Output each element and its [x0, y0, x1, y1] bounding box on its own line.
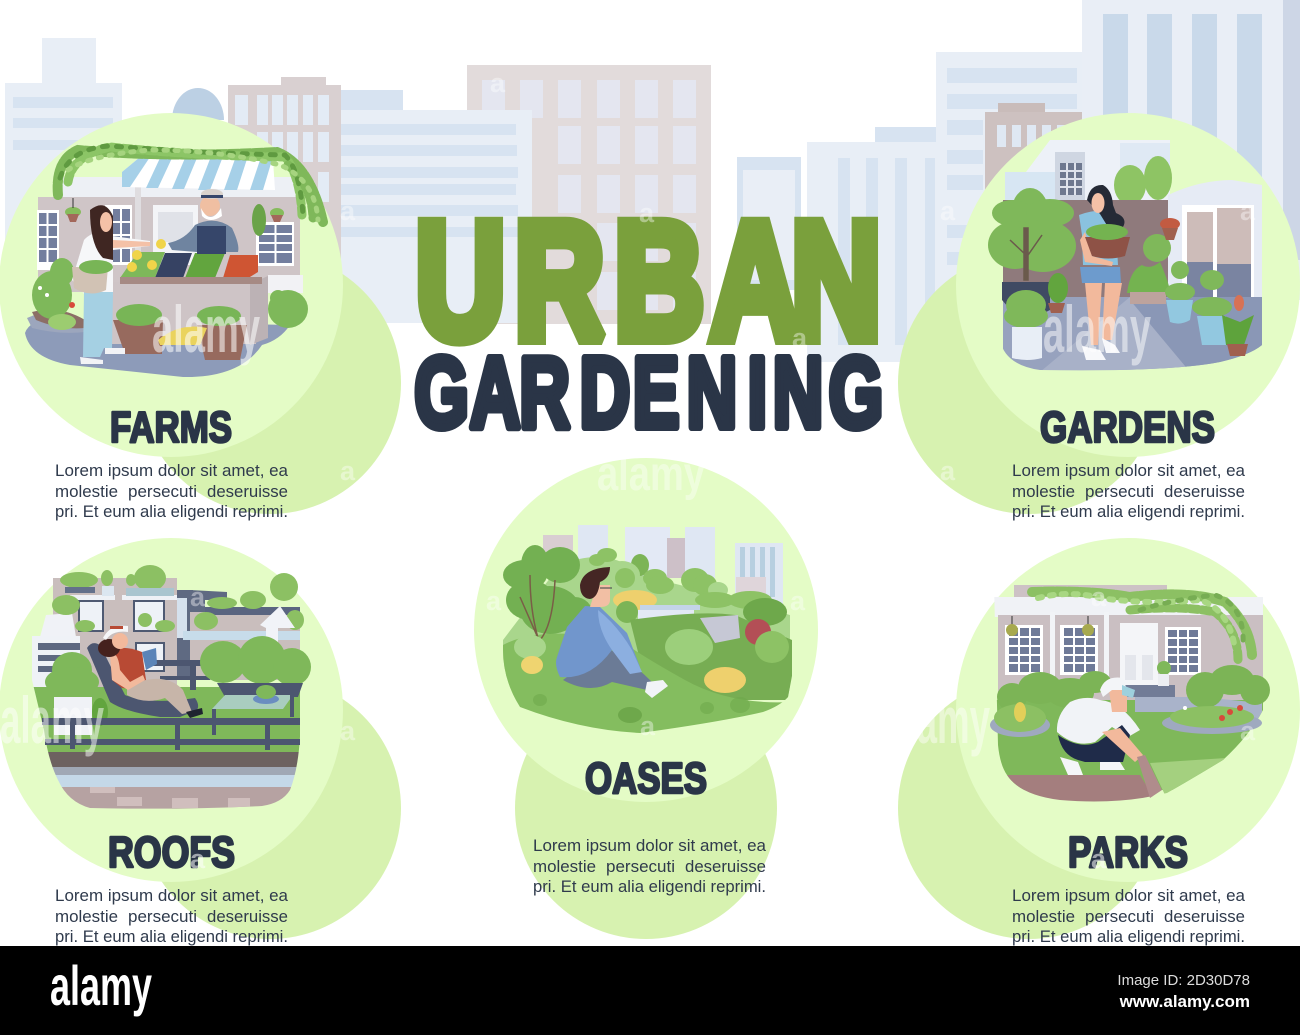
seller [156, 189, 238, 254]
heading: gardens: GARDENS [1040, 403, 1215, 452]
watermark: farms: alamy [152, 292, 260, 366]
distant buildings [543, 525, 783, 608]
city skyline background [5, 0, 1300, 362]
small watermarks: a [486, 586, 502, 616]
small watermarks [190, 68, 1256, 874]
heading: oases: OASES [585, 754, 707, 803]
right bush [268, 290, 308, 328]
small lawn shrubs [533, 694, 750, 723]
potted bush [45, 652, 108, 735]
text: farms body: Lorem ipsum dolor sit amet, ea [55, 461, 289, 480]
small watermarks: a [190, 844, 206, 874]
text: parks body: persecuti [1085, 907, 1154, 926]
chimney [260, 606, 295, 652]
building: tall brown centre [467, 65, 711, 324]
small watermarks: a [640, 711, 656, 741]
text: gardens body: molestie [1012, 482, 1075, 501]
text: farms body: molestie [55, 482, 118, 501]
windows [1005, 623, 1201, 686]
text: oases body: molestie [533, 857, 596, 876]
text: farms body: persecuti [128, 482, 197, 501]
gardener woman [1079, 185, 1130, 360]
panel: farms [0, 113, 401, 521]
building: small outlined [737, 157, 801, 290]
text: roofs body: Lorem ipsum dolor sit amet, ea [55, 886, 289, 905]
panel: parks [886, 538, 1300, 946]
pavilion [613, 590, 700, 623]
text: parks body: deseruisse [1164, 907, 1245, 926]
vines [1032, 592, 1252, 660]
heading: parks: PARKS [1068, 828, 1188, 877]
tree on left [503, 545, 593, 634]
text: gardens body [1012, 461, 1246, 521]
text: gardens body: pri. Et eum alia eligendi reprimi. [1012, 502, 1245, 521]
title: urban: URBAN [416, 189, 881, 374]
illustration: rooftop terrace [32, 565, 312, 812]
hanging baskets [1006, 616, 1094, 636]
text: parks body: pri. Et eum alia eligendi reprimi. [1012, 927, 1245, 946]
circle: roofs back [139, 677, 401, 939]
text: roofs body: deseruisse [207, 907, 288, 926]
text: oases body: persecuti [606, 857, 675, 876]
baskets [113, 304, 247, 360]
building: brown right [985, 103, 1087, 232]
mid lawn [630, 613, 792, 700]
small watermarks: a [639, 198, 655, 228]
illustration: house and lawn [990, 585, 1270, 803]
text: parks body [1012, 886, 1246, 946]
watermark: roofs: alamy [0, 683, 104, 757]
large planters [200, 636, 311, 697]
image id: Image ID: 2D30D78 [1117, 972, 1250, 989]
left flower bed [27, 258, 85, 333]
small watermarks: a [790, 586, 806, 616]
small watermarks: a [1091, 582, 1107, 612]
big potted tree [988, 188, 1076, 315]
footer logo: alamy [50, 954, 152, 1017]
right shrubs [743, 598, 789, 663]
text: farms body: deseruisse [207, 482, 288, 501]
small watermarks: a [792, 323, 808, 353]
building: brown left [228, 77, 341, 325]
circle: gardens back [898, 252, 1160, 514]
small watermarks: a [340, 456, 356, 486]
coffee table [212, 685, 294, 735]
gardener man [1057, 678, 1162, 798]
heading: roofs: ROOFS [108, 828, 235, 877]
text: parks body: molestie [1012, 907, 1075, 926]
illustration: terrace garden [988, 140, 1262, 372]
building: wide striped [341, 90, 532, 323]
circle: gardens front [956, 113, 1300, 457]
text: roofs body: persecuti [128, 907, 197, 926]
text: oases body: Lorem ipsum dolor sit amet, ea [533, 836, 767, 855]
hanging baskets [65, 198, 284, 236]
website: www.alamy.com [1119, 992, 1250, 1011]
railing [42, 718, 300, 750]
text: gardens body: persecuti [1085, 482, 1154, 501]
title: gardening: GARDENING [414, 338, 883, 449]
building: dome [172, 88, 224, 120]
circle: farms back [139, 252, 401, 514]
small watermarks: a [340, 196, 356, 226]
circle: parks back [898, 677, 1160, 939]
text: oases body: pri. Et eum alia eligendi reprimi. [533, 877, 766, 896]
text: roofs body: molestie [55, 907, 118, 926]
text: farms body: pri. Et eum alia eligendi reprimi. [55, 502, 288, 521]
building: far left tower [5, 38, 122, 323]
text: oases body [533, 836, 767, 896]
text: gardens body: Lorem ipsum dolor sit amet, ea [1012, 461, 1246, 480]
bush in white pot [1004, 290, 1048, 360]
small watermarks: a [1240, 196, 1256, 226]
reading woman on lounger [87, 626, 203, 718]
stall [111, 276, 268, 345]
produce trays [120, 250, 262, 284]
small watermarks: a [1240, 716, 1256, 746]
bushes and flower beds [990, 665, 1270, 737]
small watermarks: a [340, 716, 356, 746]
text: farms body [55, 461, 289, 521]
text: roofs body: pri. Et eum alia eligendi reprimi. [55, 927, 288, 946]
text: gardens body: deseruisse [1164, 482, 1245, 501]
customer [72, 205, 150, 364]
watermark: gardens: alamy [1043, 292, 1151, 366]
right side plants [1127, 218, 1254, 356]
text: parks body: Lorem ipsum dolor sit amet, ea [1012, 886, 1246, 905]
small watermarks: a [490, 68, 506, 98]
small leaves plant [1048, 273, 1068, 313]
yellow bush [704, 667, 746, 693]
footer bar [0, 946, 1300, 1035]
top planters [52, 565, 304, 632]
watermark: oases: alamy [597, 448, 705, 501]
back hill [503, 557, 790, 700]
small watermarks: a [940, 196, 956, 226]
text: oases body: deseruisse [685, 857, 766, 876]
circle: farms front [0, 113, 343, 457]
building: tall right [1082, 0, 1300, 300]
small watermarks: a [940, 456, 956, 486]
small watermarks: a [190, 582, 206, 612]
illustration: city park [503, 525, 792, 740]
panel: roofs [0, 538, 401, 946]
circle: parks front [956, 538, 1300, 882]
seated man [556, 567, 668, 698]
awning [122, 157, 275, 190]
small watermarks: a [1091, 844, 1107, 874]
heading: farms: FARMS [110, 403, 232, 452]
text: roofs body [55, 886, 289, 946]
watermark: parks: alamy [886, 683, 990, 757]
circle: roofs front [0, 538, 343, 882]
panel: gardens [898, 113, 1300, 521]
panel: oases [474, 448, 818, 939]
mid trees [589, 548, 772, 609]
illustration: market stall [25, 146, 323, 377]
foreground lawn [503, 634, 790, 740]
vines [58, 146, 323, 222]
building: vertical striped [807, 127, 947, 362]
circle: oases front [474, 458, 818, 802]
circle: oases back [515, 677, 777, 939]
building: right striped [936, 52, 1086, 362]
